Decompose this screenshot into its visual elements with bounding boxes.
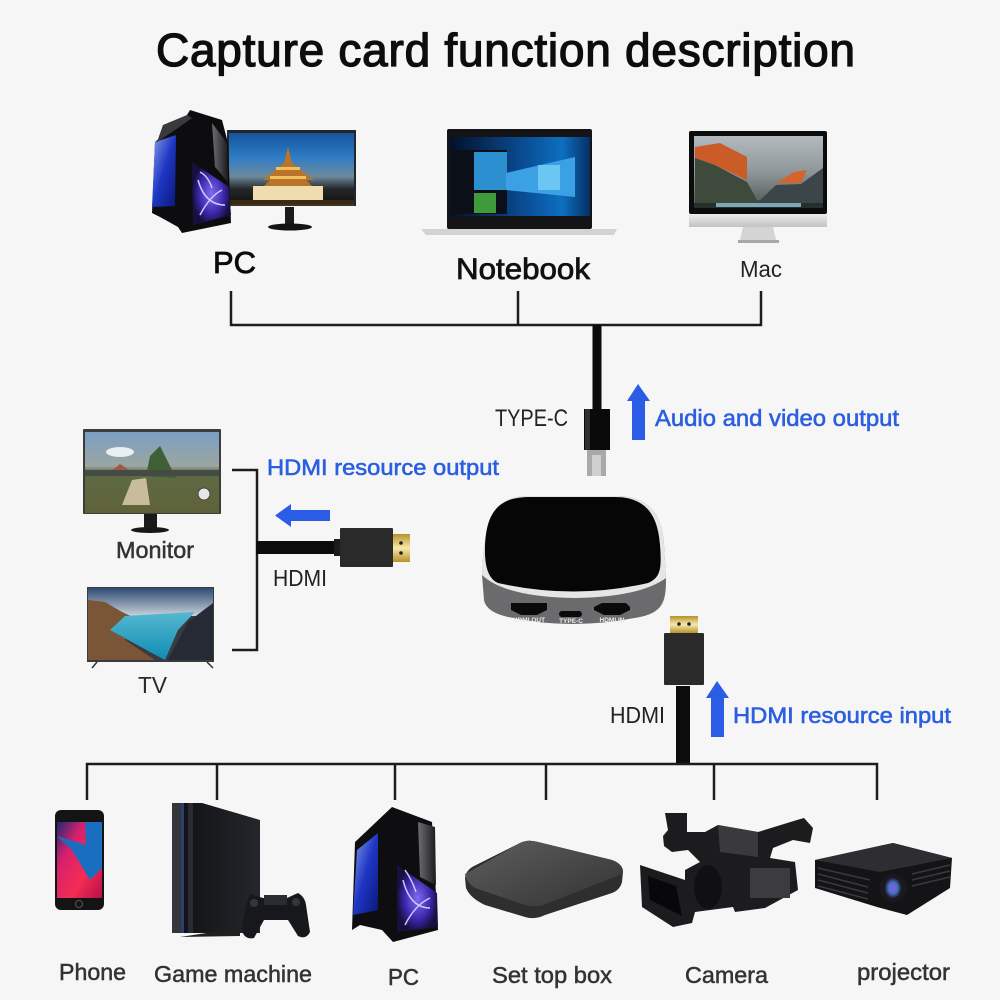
label: TYPE-C: TYPE-C — [495, 405, 568, 432]
label: TV: TV — [138, 672, 168, 698]
icon: camera — [640, 813, 813, 927]
connector: left bracket — [232, 470, 257, 650]
icon: PC tower — [352, 807, 438, 942]
icon: HDMI cable right — [664, 616, 704, 764]
title: Capture card function description — [156, 24, 855, 76]
label: HDMI resource input: HDMI resource input — [733, 703, 952, 728]
label: Phone: Phone — [59, 959, 126, 985]
label: Set top box: Set top box — [492, 962, 613, 988]
label: PC: PC — [213, 245, 256, 280]
label: port TYPE-C: TYPE-C — [559, 618, 583, 625]
icon: set top box — [465, 841, 623, 918]
label: port HDMI IN: HDMI IN — [600, 617, 625, 624]
icon: TV — [87, 587, 214, 668]
icon: monitor with game — [83, 429, 221, 533]
label: HDMI resource output: HDMI resource output — [267, 455, 500, 480]
icon: HDMI cable left — [256, 528, 410, 567]
icon: Mac — [689, 131, 827, 243]
label: Mac: Mac — [740, 256, 782, 282]
icon: PC tower and monitor — [152, 110, 356, 233]
arrow: up, HDMI input — [706, 681, 729, 737]
icon: game console and controller — [172, 803, 310, 938]
label: port HDMI OUT: HDMI OUT — [513, 617, 545, 624]
label: Game machine: Game machine — [154, 961, 312, 987]
icon: projector — [815, 843, 952, 915]
label: HDMI left: HDMI — [273, 565, 327, 591]
label: Camera: Camera — [685, 962, 768, 988]
label: projector: projector — [857, 959, 950, 985]
connector: top bracket — [231, 291, 761, 325]
icon: capture card — [482, 496, 666, 625]
connector: bottom bracket — [87, 764, 877, 800]
label: PC bottom: PC — [388, 964, 419, 990]
label: Notebook: Notebook — [456, 253, 591, 286]
label: HDMI right: HDMI — [610, 702, 665, 728]
label: Audio and video output: Audio and video output — [655, 405, 900, 431]
icon: notebook — [421, 129, 617, 235]
arrow: left, HDMI output — [275, 504, 330, 527]
arrow: up, audio and video output — [627, 384, 650, 440]
label: Monitor: Monitor — [116, 537, 194, 563]
icon: USB Type-C cable — [584, 325, 610, 476]
icon: phone — [55, 810, 104, 910]
